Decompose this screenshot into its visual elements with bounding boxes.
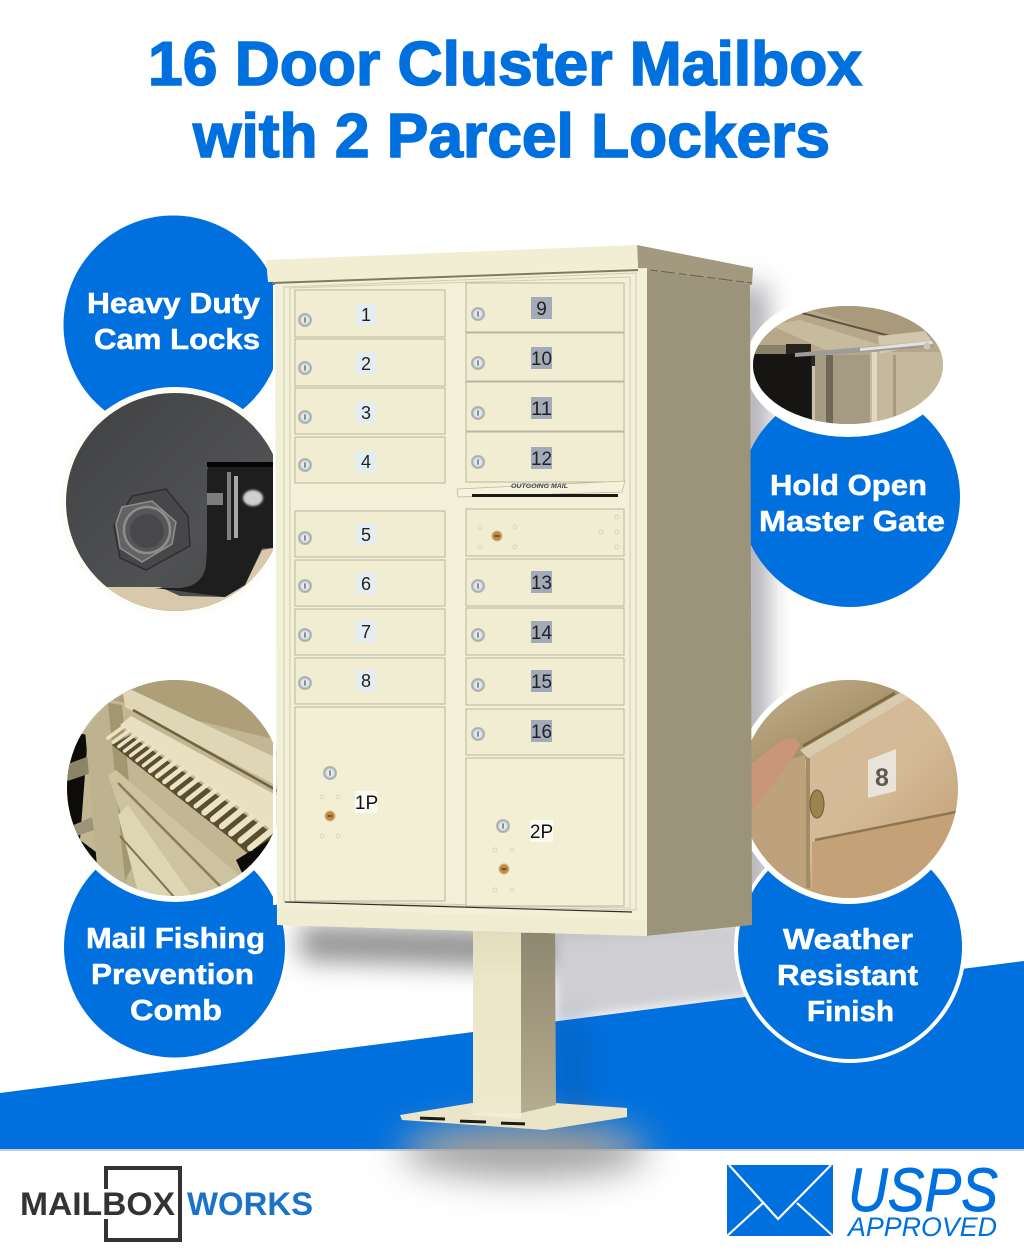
gap beside cabinet [273,285,276,905]
callout text: mail fishing prevention comb [86,923,265,1027]
logo: mailbox works: WORKS [187,1186,313,1222]
cabinet roof side [637,245,753,285]
logo: mailbox works: MAILBOX [20,1186,176,1222]
outgoing mail slot: OUTGOING MAIL [511,484,568,490]
door 1: 1 [361,305,371,325]
photo: weather resistant finish [751,680,958,904]
callout text: hold open master gate: Master Gate [759,506,945,538]
door 8 [295,658,445,704]
callout text: hold open master gate [759,470,945,538]
callout bubble: mail fishing prevention comb [64,836,285,1058]
door 14: 14 [531,623,552,644]
door 4 [295,437,445,483]
callout text: hold open master gate: Hold Open [770,470,927,502]
cabinet frame lines [284,273,636,910]
door 9: 9 [536,299,547,320]
callout text: weather resistant finish [777,924,918,1028]
door 7: 7 [361,622,371,642]
base plate [400,1103,627,1130]
logo: usps approved: USPS [848,1157,998,1225]
post front face [473,931,521,1113]
door 10: 10 [531,349,552,370]
parcel locker 2P [466,758,624,906]
callout bubble: heavy duty cam locks [64,216,282,434]
callout text: mail fishing prevention comb: Prevention [91,959,254,991]
photo: mail fishing prevention comb [67,680,277,902]
title: 16 Door Cluster Mailbox [148,30,863,99]
post side face [521,933,556,1113]
door 16: 16 [531,722,552,743]
callout bubble: weather resistant finish [734,831,966,1063]
title: with 2 Parcel Lockers [192,102,830,171]
door 13: 13 [531,573,552,594]
parcel locker 1P [295,707,445,901]
logo: mailbox works [20,1168,313,1240]
door 6 [295,560,445,606]
door 2 [295,339,445,386]
cabinet front face [275,268,647,936]
door 5: 5 [361,525,371,545]
photo: hold open master gate [750,306,943,437]
door 2: 2 [361,354,371,374]
callout text: weather resistant finish: Resistant [777,960,918,992]
callout text: mail fishing prevention comb: Comb [130,995,222,1027]
door 11 [466,382,624,431]
door 4: 4 [361,452,371,472]
footer shadow [0,1120,1024,1257]
door 14 [466,608,624,655]
door 7 [295,609,445,655]
door 16 [466,709,624,755]
shadow behind mailbox [300,285,767,1020]
door 10 [466,333,624,381]
door 11: 11 [531,399,552,420]
blue diagonal band [0,961,1024,1149]
door 8: 8 [361,671,371,691]
door 15 [466,658,624,705]
door 5 [295,511,445,557]
callout text: heavy duty cam locks [87,288,260,356]
mailbox post [400,931,627,1130]
icon: envelope [727,1165,833,1236]
door 3 [295,388,445,434]
cabinet base trim [277,908,645,936]
logo: usps approved: APPROVED [846,1212,997,1242]
callout bubble: hold open master gate [740,387,960,607]
callout text: mail fishing prevention comb: Mail Fishing [86,923,265,955]
callout text: weather resistant finish: Weather [783,924,913,956]
photo: weather resistant finish: 8 [875,764,889,792]
photo: cam lock close-up [60,387,290,620]
title [148,30,863,171]
callout text: heavy duty cam locks: Heavy Duty [87,288,260,320]
cluster mailbox cabinet [266,245,753,936]
outgoing mail slot [457,481,625,497]
door 12: 12 [531,449,552,470]
door 6: 6 [361,574,371,594]
door 13 [466,559,624,606]
blank panel with brass lock [466,509,624,556]
cabinet roof cap [266,245,638,282]
band shadows near post [460,1020,600,1154]
door 3: 3 [361,403,371,423]
cabinet side face [645,270,752,936]
door 1 [295,290,445,337]
door 12 [466,432,624,482]
callout text: heavy duty cam locks: Cam Locks [94,324,260,356]
logo: usps approved [727,1157,998,1242]
door 15: 15 [531,672,552,693]
door 9 [466,283,624,332]
callout text: weather resistant finish: Finish [807,996,894,1028]
parcel locker 2P: 2P [530,822,553,843]
parcel locker 1P: 1P [355,793,378,814]
